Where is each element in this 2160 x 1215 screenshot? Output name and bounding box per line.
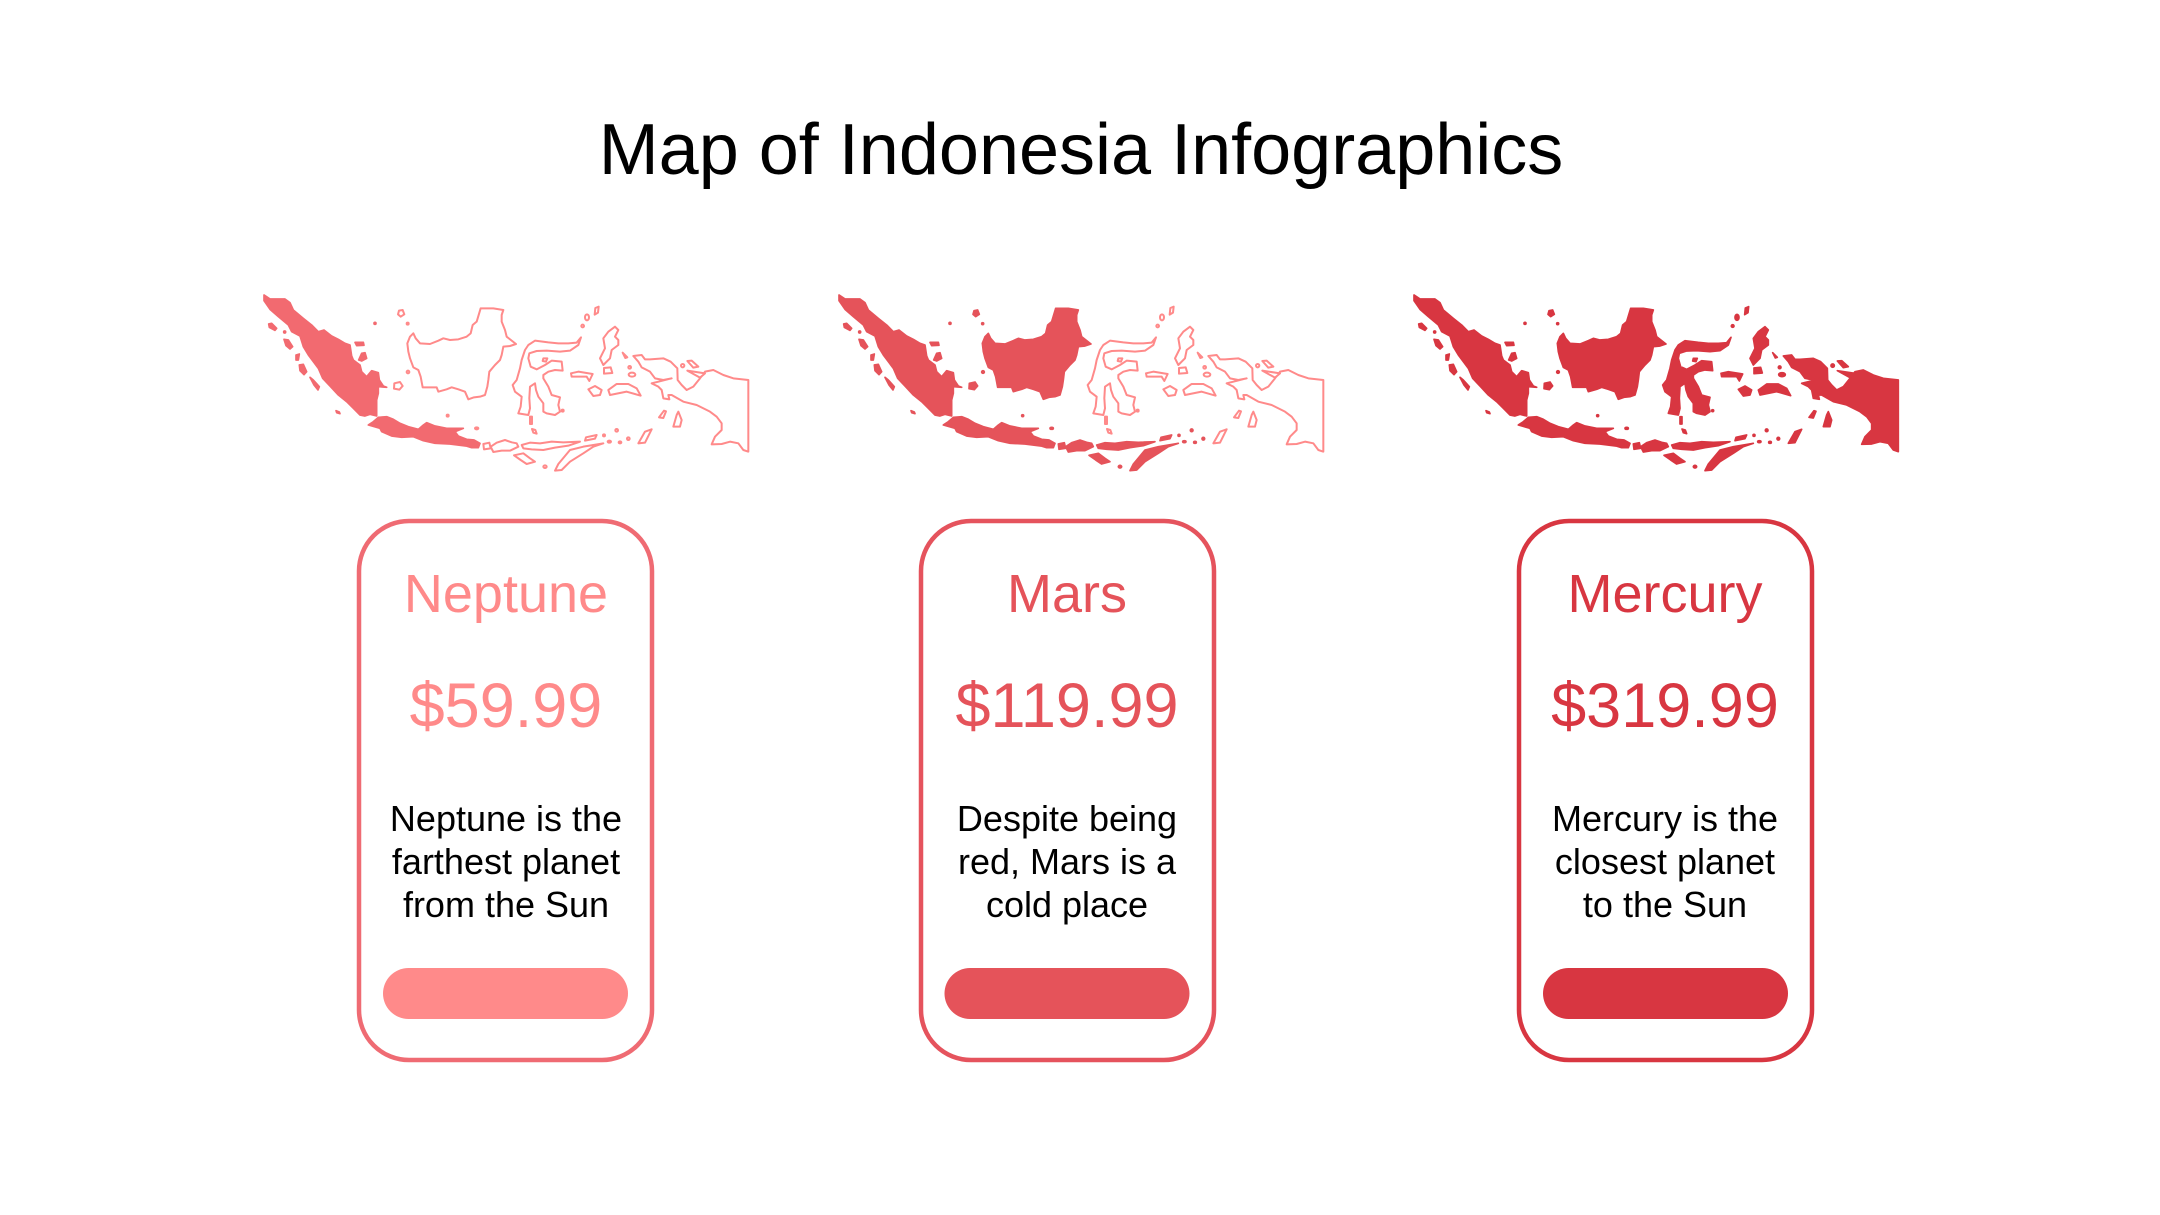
map: Mercury, all islands filled (1414, 295, 1898, 471)
description: Mercury: Mercury is the (1552, 798, 1778, 839)
description: Mercury: closest planet (1555, 841, 1775, 882)
price: Mercury: $319.99 (1551, 671, 1779, 741)
heading: Mercury: Mercury (1567, 564, 1763, 624)
description: Neptune: farthest planet (392, 841, 620, 882)
panel: Mercury (1519, 521, 1812, 1060)
panel: Mars (921, 521, 1214, 1060)
description: Neptune: from the Sun (403, 884, 609, 925)
map: Neptune, Sumatra and Java filled (264, 295, 748, 471)
description: Mars: Despite being (957, 798, 1177, 839)
heading: Mars: Mars (1007, 564, 1127, 624)
heading: Neptune: Neptune (404, 564, 608, 624)
button: Neptune (383, 968, 628, 1019)
map: Mars, western and central islands filled (839, 295, 1323, 471)
price: Mars: $119.99 (955, 671, 1179, 741)
description: Mars: red, Mars is a (958, 841, 1177, 882)
button: Mars (944, 968, 1190, 1019)
description: Mars: cold place (986, 884, 1148, 925)
button: Mercury (1543, 968, 1788, 1019)
description: Neptune: Neptune is the (390, 798, 622, 839)
title: Map of Indonesia Infographics (599, 110, 1563, 190)
price: Neptune: $59.99 (410, 671, 602, 741)
panel: Neptune (359, 521, 652, 1060)
description: Mercury: to the Sun (1583, 884, 1747, 925)
